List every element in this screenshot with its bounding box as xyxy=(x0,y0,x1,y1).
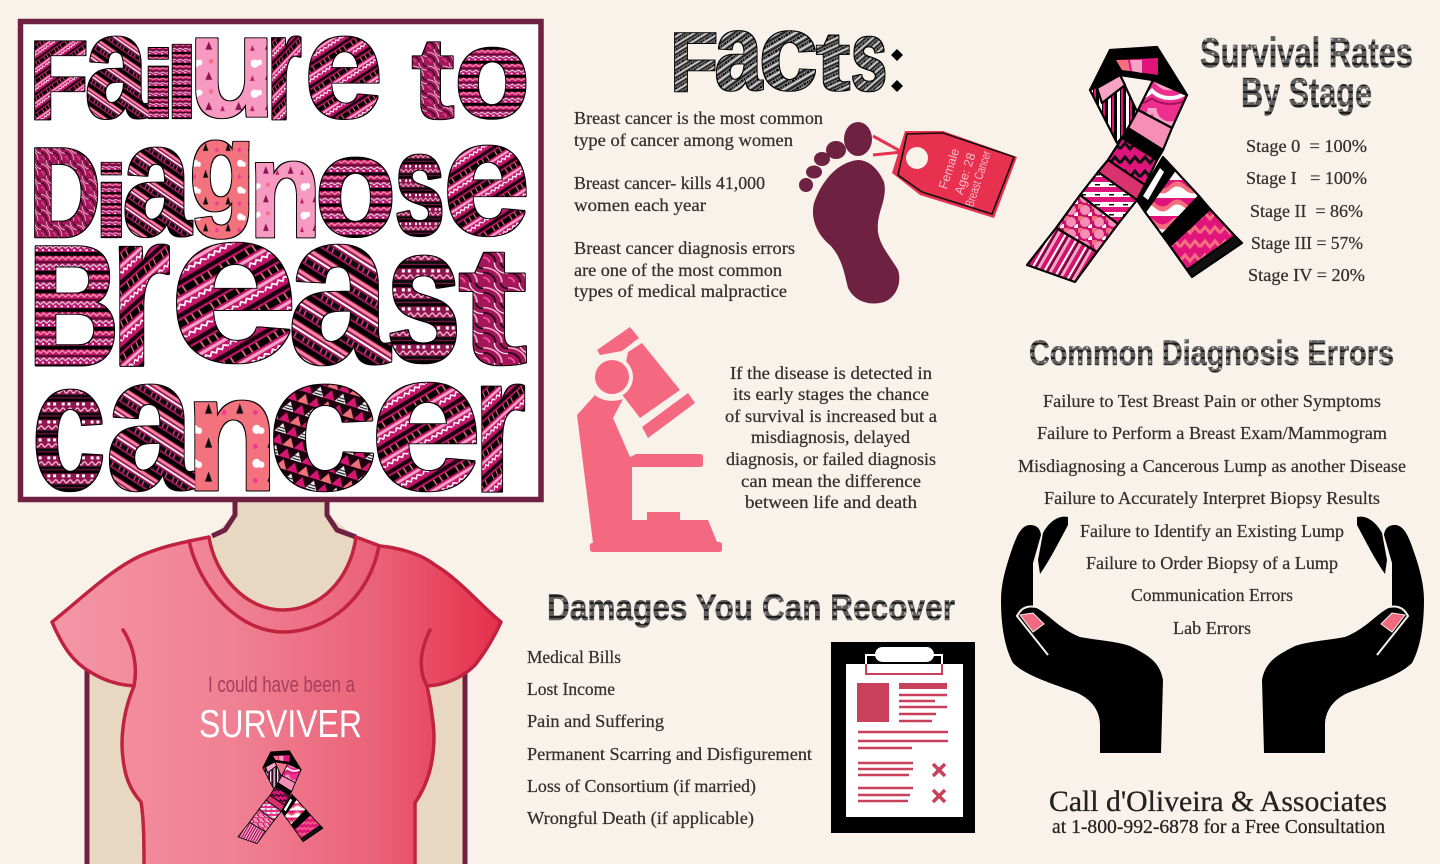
text block: damages list: Permanent Scarring and Disfigurement xyxy=(527,744,812,764)
text block: facts: Breast cancer- kills 41,000 xyxy=(574,173,765,193)
text block: facts xyxy=(574,108,823,301)
title: Failure to: l xyxy=(165,28,199,139)
text block: common diagnosis errors list: Communication Errors xyxy=(1131,585,1293,605)
text block: common diagnosis errors list: Failure to Perform a Breast Exam/Mammogram xyxy=(1037,423,1387,443)
shirt slogan: I could have been a xyxy=(208,672,356,697)
text block: facts: Breast cancer is the most common xyxy=(574,108,823,128)
illustration: person wearing t-shirt xyxy=(52,500,501,864)
icon: toe tag: Female xyxy=(936,147,962,191)
title: Cancer: a xyxy=(106,316,194,529)
title: Diagnose: i xyxy=(94,146,129,258)
shirt slogan: SURVIVER xyxy=(199,703,362,746)
text block: early detection: between life and death xyxy=(745,492,917,512)
icon: microscope xyxy=(577,327,722,552)
text block: damages list: Loss of Consortium (if married) xyxy=(527,776,756,797)
title: Breast: B xyxy=(28,210,119,401)
icon: right cupped hand xyxy=(1262,517,1424,753)
text block: survival rates list: Stage 0 = 100% xyxy=(1246,136,1367,156)
title: Breast xyxy=(28,166,527,412)
title panel xyxy=(20,0,541,533)
title: Breast: a xyxy=(288,168,390,408)
shirt slogan xyxy=(199,672,362,746)
t-shirt xyxy=(52,537,501,864)
icon: clipboard xyxy=(831,642,975,833)
title: Cancer xyxy=(32,313,525,533)
text block: facts: type of cancer among women xyxy=(574,130,793,150)
title: Breast: r xyxy=(110,166,170,412)
text block: early detection: of survival is increased but a xyxy=(725,406,937,426)
heading: Survival Rates By Stage: By Stage xyxy=(1241,69,1372,116)
heading: Facts: F xyxy=(670,17,718,110)
title: Diagnose: g xyxy=(189,95,255,239)
title: Diagnose: n xyxy=(249,113,321,266)
text block: facts: are one of the most common xyxy=(574,260,782,280)
text block: common diagnosis errors list: Failure to Identify an Existing Lump xyxy=(1080,521,1344,541)
title: Failure to: o xyxy=(455,2,529,145)
text block: survival rates list: Stage I = 100% xyxy=(1246,168,1367,188)
title: Diagnose xyxy=(29,87,530,269)
icon: survival ribbon xyxy=(1027,47,1242,282)
call to action: at 1-800-992-6878 for a Free Consultation xyxy=(1052,816,1385,838)
text block: common diagnosis errors list: Misdiagnosing a Cancerous Lump as another Disease xyxy=(1018,456,1406,476)
heading: Facts: t xyxy=(816,15,850,108)
title: Breast: t xyxy=(458,212,527,398)
text block: early detection: its early stages the chance xyxy=(733,384,929,404)
icon: left cupped hand xyxy=(1001,517,1163,753)
title: Diagnose: o xyxy=(315,108,396,266)
text block: survival rates list: Stage II = 86% xyxy=(1250,201,1363,221)
icon: foot with toe tag xyxy=(799,122,1017,303)
heading: Facts xyxy=(670,0,903,113)
icon: foot xyxy=(799,122,899,303)
title: Diagnose: a xyxy=(123,91,192,269)
heading: Facts: s xyxy=(851,0,887,111)
text block: early detection: can mean the difference xyxy=(741,471,921,491)
icon: small ribbon on shirt xyxy=(238,751,323,844)
text block: early detection: misdiagnosis, delayed xyxy=(751,427,910,447)
title: Diagnose: D xyxy=(29,123,101,264)
title: Failure to: F xyxy=(29,18,88,143)
text block: survival rates list: Stage IV = 20% xyxy=(1248,265,1365,285)
text block: damages list: Pain and Suffering xyxy=(527,711,664,731)
body: skin, neck and arms xyxy=(87,500,466,864)
title: Breast: e xyxy=(169,166,298,406)
call to action xyxy=(1049,785,1387,838)
text block: facts: Breast cancer diagnosis errors xyxy=(574,238,795,258)
text block: early detection xyxy=(725,363,937,512)
heading: Survival Rates By Stage xyxy=(1200,29,1413,116)
icon: toe tag: Breast Cancer xyxy=(963,149,994,209)
text block: common diagnosis errors list: Lab Errors xyxy=(1173,618,1251,638)
text block: common diagnosis errors list xyxy=(1018,391,1406,638)
text block: damages list xyxy=(527,647,812,829)
title: Cancer: r xyxy=(474,315,525,533)
text block: early detection: If the disease is detected in xyxy=(730,363,932,383)
icon: toe tag xyxy=(873,131,1017,218)
title: Cancer: c xyxy=(268,317,378,529)
text block: damages list: Medical Bills xyxy=(527,647,621,667)
text block: facts: women each year xyxy=(574,195,706,215)
title: Diagnose: s xyxy=(395,103,445,265)
title: Failure to: t xyxy=(412,14,454,142)
text block: facts: types of medical malpractice xyxy=(574,281,787,301)
text block: early detection: diagnosis, or failed diagnosis xyxy=(726,449,936,469)
text block: damages list: Wrongful Death (if applicable) xyxy=(527,808,754,829)
text block: damages list: Lost Income xyxy=(527,679,615,699)
text block: common diagnosis errors list: Failure to Accurately Interpret Biopsy Results xyxy=(1044,488,1380,508)
call to action: Call d'Oliveira & Associates xyxy=(1049,785,1387,818)
title: Diagnose: e xyxy=(443,87,530,268)
text block: common diagnosis errors list: Failure to Test Breast Pain or other Symptoms xyxy=(1043,391,1381,411)
title: Failure to xyxy=(29,0,529,151)
title: Cancer: e xyxy=(370,313,482,530)
text block: common diagnosis errors list: Failure to Order Biopsy of a Lump xyxy=(1086,553,1338,573)
text block: survival rates list xyxy=(1246,136,1367,285)
title: Cancer: c xyxy=(32,325,105,527)
icon: toe tag: Age: 28 xyxy=(952,151,979,196)
title: Breast: s xyxy=(386,187,461,402)
title: Cancer: n xyxy=(186,343,277,525)
title: Failure to: i xyxy=(140,32,176,138)
text block: survival rates list: Stage III = 57% xyxy=(1251,233,1363,253)
heading: Damages You Can Recover: Damages You Can Recover xyxy=(547,587,955,628)
